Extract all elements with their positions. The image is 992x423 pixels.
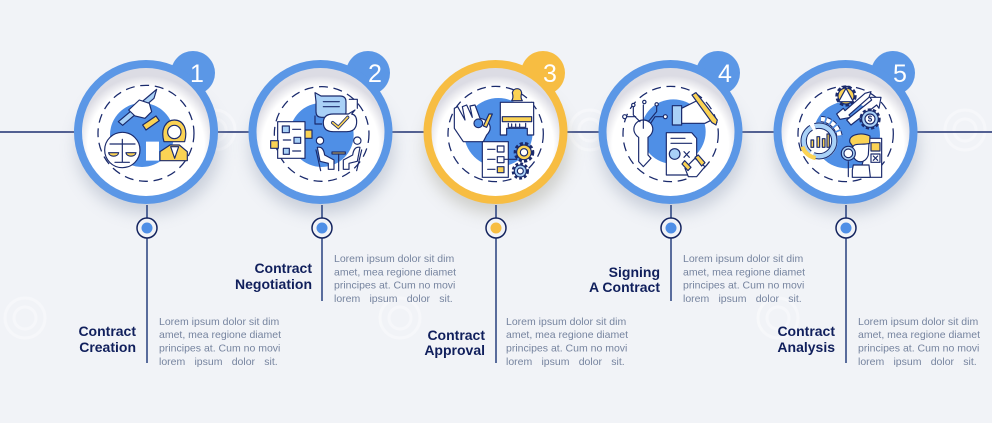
circle frame 1 with number badge: [74, 51, 220, 214]
heading: Contract Analysis: Analysis: [777, 339, 835, 355]
heading: Contract Creation: Contract: [78, 323, 136, 339]
text block 2: Lorem ipsum dolor sit dim: [334, 253, 454, 265]
heading: Contract Negotiation: Negotiation: [235, 276, 312, 292]
circle frame 1 with number badge: 1: [190, 60, 204, 88]
text block 3: amet, mea regione diamet: [506, 329, 628, 341]
step 5: contract analysis: [774, 51, 919, 214]
connector 4 with node: [661, 205, 681, 301]
text block 3: Lorem ipsum dolor sit dim: [506, 316, 626, 328]
heading: Contract Negotiation: Contract: [254, 260, 312, 276]
text block 1: principes at. Cum no movi: [159, 342, 280, 354]
icon: digital key, signing hand and document: [623, 86, 718, 182]
step 3: contract approval: [424, 51, 569, 214]
icon: warning, arrows, chart and analyst: [798, 86, 893, 182]
step 1: contract creation: [74, 51, 220, 214]
connector 1 with node: [137, 205, 157, 363]
icon: warning, arrows, chart and analyst: $: [868, 115, 873, 124]
text block 5: lorem ipsum dolor sit.: [858, 356, 977, 368]
circle frame 3 with number badge: [424, 51, 569, 214]
text block 4: amet, mea regione diamet: [683, 266, 805, 278]
step 4: signing a contract: [598, 51, 744, 214]
icon: speech bubbles, checklist and meeting: [271, 87, 369, 181]
heading: Contract Creation: Creation: [79, 339, 136, 355]
icon: hand, stamp, checklist and gears: [448, 86, 543, 182]
text block 1: Lorem ipsum dolor sit dim: [159, 316, 279, 328]
heading: Contract Approval: Contract: [427, 327, 485, 343]
circle frame 5 with number badge: 5: [893, 60, 907, 88]
horizontal timeline axis: [0, 131, 992, 133]
connector 3 with node: [486, 205, 506, 363]
text block 2: principes at. Cum no movi: [334, 280, 455, 292]
icon: pen hand, scales and lawyer: [98, 85, 194, 181]
step 2: contract negotiation: [248, 51, 394, 214]
text block 4: Lorem ipsum dolor sit dim: [683, 253, 803, 265]
text block 4: principes at. Cum no movi: [683, 280, 804, 292]
heading: Contract Analysis: Contract: [777, 323, 835, 339]
connector 5 with node: [836, 205, 856, 363]
text block 3: principes at. Cum no movi: [506, 342, 627, 354]
heading: Signing A Contract: A Contract: [589, 279, 660, 295]
text block 2: amet, mea regione diamet: [334, 266, 456, 278]
text block 3: lorem ipsum dolor sit.: [506, 356, 625, 368]
text block 1: lorem ipsum dolor sit.: [159, 356, 278, 368]
heading: Contract Approval: Approval: [424, 342, 485, 358]
text block 2: lorem ipsum dolor sit.: [334, 293, 453, 305]
circle frame 4 with number badge: [598, 51, 744, 214]
circle frame 3 with number badge: 3: [543, 60, 557, 88]
text block 5: Lorem ipsum dolor sit dim: [858, 316, 978, 328]
connector 2 with node: [312, 205, 332, 301]
text block 1: amet, mea regione diamet: [159, 329, 281, 341]
circle frame 5 with number badge: [774, 51, 919, 214]
text block 5: principes at. Cum no movi: [858, 342, 979, 354]
text block 5: amet, mea regione diamet: [858, 329, 980, 341]
circle frame 2 with number badge: 2: [368, 60, 382, 88]
heading: Signing A Contract: Signing: [609, 264, 660, 280]
circle frame 4 with number badge: 4: [718, 60, 732, 88]
text block 4: lorem ipsum dolor sit.: [683, 293, 802, 305]
circle frame 2 with number badge: [248, 51, 394, 214]
